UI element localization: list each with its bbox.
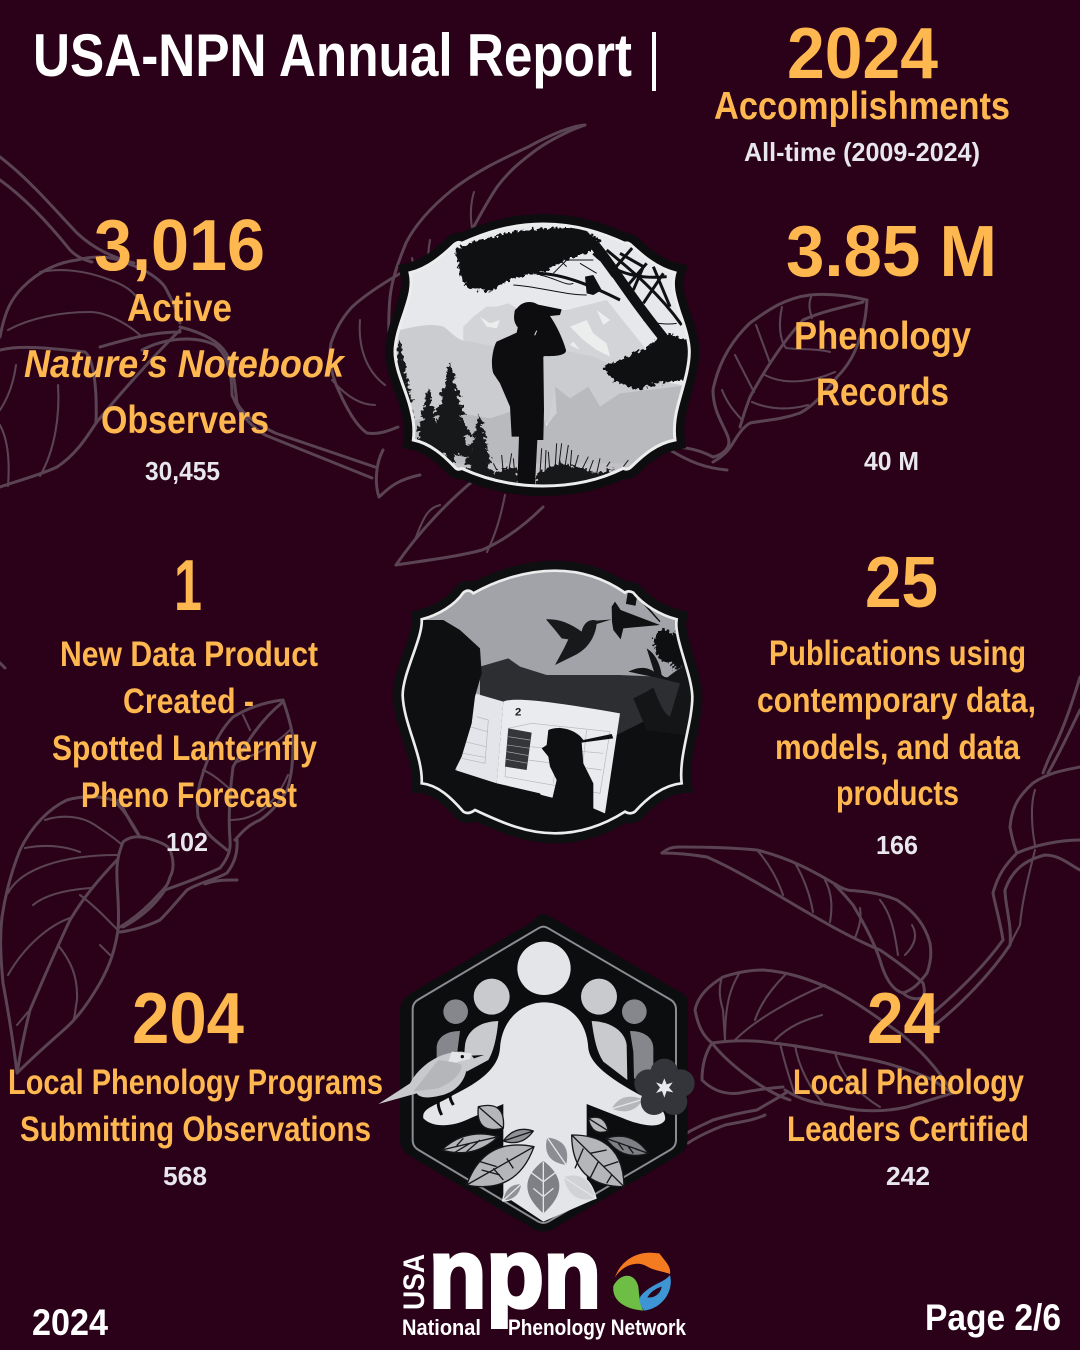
stat: local phenology leaders: Local Phenology — [793, 1063, 1024, 1102]
stat: publications: contemporary data, — [757, 681, 1036, 720]
stat: publications — [757, 543, 1036, 860]
stat: phenology records: Records — [816, 371, 949, 414]
stat: phenology records — [786, 212, 997, 476]
icon: logo ball — [613, 1253, 671, 1311]
icon: community hexagon badge — [378, 923, 695, 1223]
icon: field notebook and hummingbird badge — [397, 567, 697, 837]
logo: USA-NPN: Phenology Network — [508, 1315, 687, 1340]
stat: publications: 166 — [876, 830, 918, 860]
logo: USA-NPN — [398, 1219, 687, 1340]
stat: publications: 25 — [865, 543, 938, 623]
logo: USA-NPN: USA — [398, 1254, 431, 1310]
stat: publications: Publications using — [769, 634, 1026, 673]
stat: active observers: Observers — [101, 399, 269, 442]
stat: publications: models, and data — [775, 728, 1020, 767]
stat: new data product — [52, 546, 318, 857]
stat: active observers: 3,016 — [94, 206, 265, 286]
stat: local phenology programs: Submitting Observations — [20, 1110, 371, 1149]
stat: publications: products — [836, 774, 959, 813]
stat: active observers — [24, 206, 346, 486]
stat: local phenology programs: 568 — [163, 1161, 207, 1191]
stat: local phenology programs — [8, 979, 383, 1191]
stat: new data product: Spotted Lanternfly — [52, 729, 317, 768]
title: USA-NPN Annual Report — [33, 22, 632, 89]
heading: 2024 accomplishments: 2024 — [787, 14, 938, 94]
icon: field notebook and hummingbird badge: 2 — [515, 706, 521, 718]
stat: new data product: Created - — [123, 682, 254, 721]
stat: active observers: Nature’s Notebook — [24, 343, 346, 386]
icon: observer with binoculars badge — [384, 220, 697, 493]
stat: phenology records: 3.85 M — [786, 212, 997, 292]
background leaf illustration: upper right — [620, 294, 867, 470]
stat: active observers: 30,455 — [145, 456, 220, 486]
stat: new data product: 1 — [174, 546, 202, 626]
heading: 2024 accomplishments: Accomplishments — [714, 85, 1010, 128]
stat: new data product: New Data Product — [60, 635, 318, 674]
background leaf illustration: upper left and centre — [0, 125, 585, 565]
stat: local phenology programs: 204 — [132, 979, 244, 1059]
stat: local phenology leaders: 24 — [867, 979, 940, 1059]
background leaf illustration: lower left — [1, 700, 293, 1073]
stat: local phenology programs: Local Phenology Programs — [8, 1063, 383, 1102]
stat: local phenology leaders: 242 — [886, 1161, 930, 1191]
heading: 2024 accomplishments — [714, 14, 1010, 167]
footer year: 2024 — [32, 1302, 108, 1343]
stat: phenology records: 40 M — [864, 446, 919, 476]
stat: phenology records: Phenology — [794, 315, 971, 358]
stat: local phenology leaders — [787, 979, 1029, 1191]
logo: USA-NPN: npn — [429, 1219, 601, 1328]
stat: new data product: Pheno Forecast — [81, 776, 297, 815]
stat: local phenology leaders: Leaders Certified — [787, 1110, 1029, 1149]
stat: active observers: Active — [127, 287, 232, 330]
footer page number: Page 2/6 — [925, 1297, 1061, 1338]
heading: 2024 accomplishments: All-time (2009-2024) — [744, 137, 980, 167]
logo: USA-NPN: National — [402, 1315, 481, 1340]
background leaf illustration: lower right — [0, 663, 1080, 1143]
stat: new data product: 102 — [166, 827, 208, 857]
